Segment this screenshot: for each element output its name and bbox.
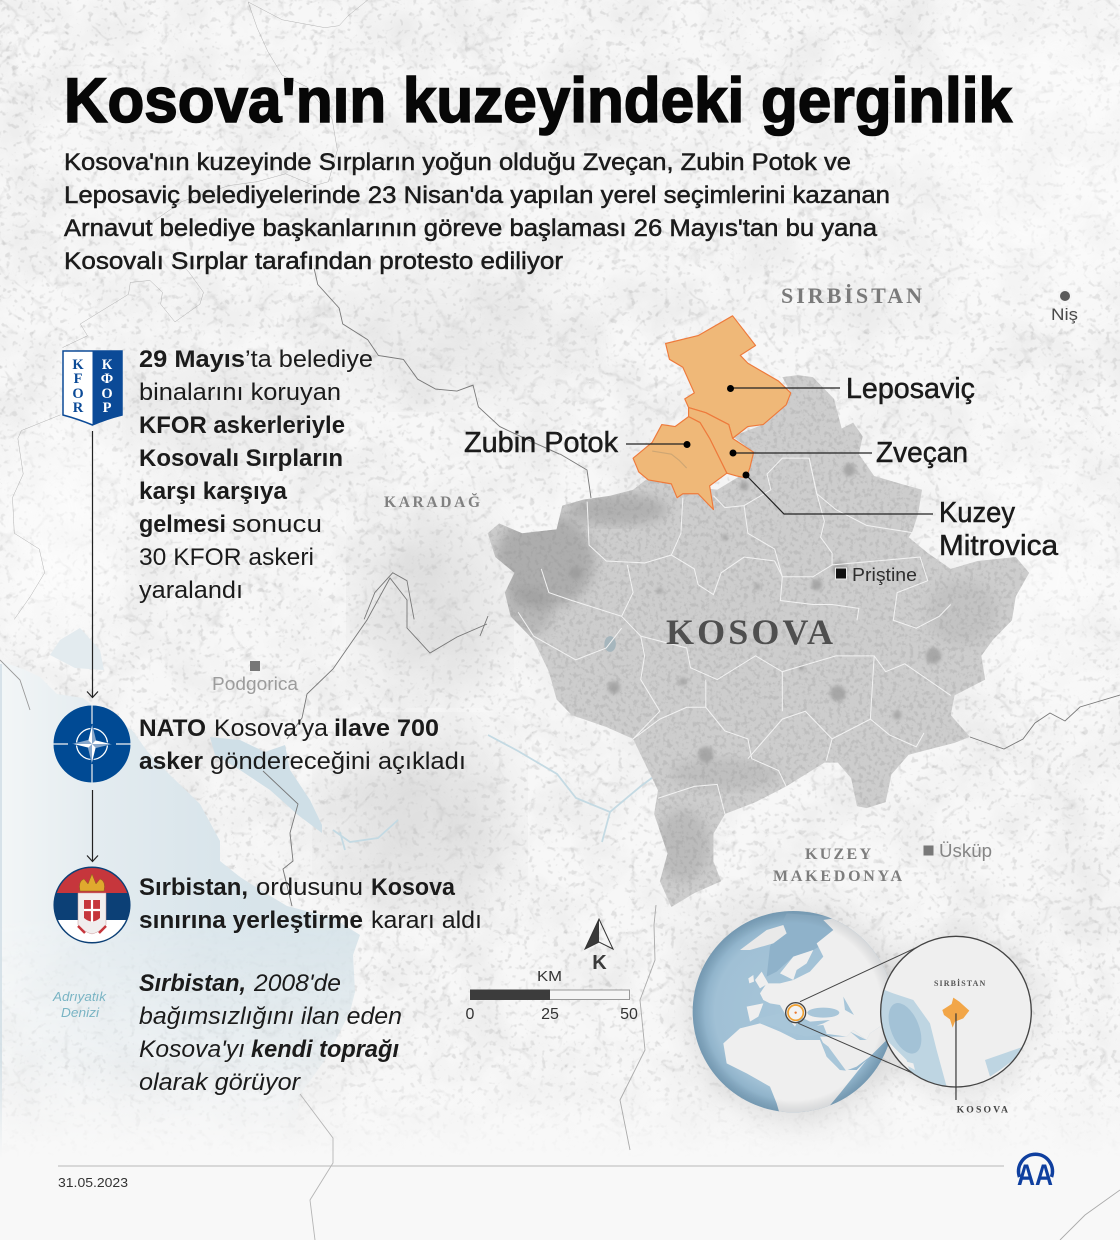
region: Zubin Potok (633, 417, 727, 510)
label: KOSOVA: KOSOVA (666, 612, 833, 652)
intro text: Arnavut belediye başkanlarının göreve başlaması 26 Mayıs'tan bu yana (64, 215, 877, 242)
label: Adriyatik Denizi (52, 989, 108, 1020)
text: 29 Mayıs: ’ta belediye (245, 346, 373, 373)
callout: Zveçan: Zveçan (876, 437, 968, 469)
region: Zvečan (689, 408, 754, 478)
text: Sırbistan 2008: kendi toprağı (251, 1036, 399, 1063)
text: Sırbistan 2008: 2008'de (253, 970, 341, 997)
footer line (58, 1165, 1004, 1167)
callout: Kuzey Mitrovica (742, 472, 1058, 562)
icon: KFOR shield: F (74, 371, 83, 387)
text: 29 Mayıs: binalarını koruyan (139, 379, 341, 406)
text: 29 Mayıs: gelmesi (139, 511, 226, 538)
callout: Kuzey Mitrovica: Mitrovica (939, 530, 1058, 562)
scale bar: 25 (541, 1006, 559, 1023)
icon: KFOR shield: K (72, 357, 84, 373)
text: NATO: asker (139, 748, 203, 775)
scale bar: 0 (466, 1006, 475, 1023)
city: Üsküp: Üsküp (939, 840, 992, 861)
icon: KFOR shield: О (101, 386, 113, 402)
text: Sırbistan 2008 (139, 970, 402, 1096)
globe (692, 911, 888, 1112)
icon: KFOR shield (63, 351, 122, 425)
lake and rivers (50, 628, 660, 850)
text: 29 Mayıs: sonucu (232, 511, 322, 538)
icon: KFOR shield: Ф (101, 371, 113, 387)
intro text: Kosova'nın kuzeyinde Sırpların yoğun olduğu Zveçan, Zubin Potok ve (64, 149, 851, 176)
intro text (64, 149, 890, 275)
text: 29 Mayıs: 30 KFOR askeri (139, 544, 314, 571)
title: Kosova'nın kuzeyindeki gerginlik (64, 66, 1013, 136)
text: Sırbistan army: Kosova (371, 874, 455, 901)
region: Leposavić (666, 316, 791, 438)
text: NATO: Kosova'ya (214, 715, 328, 742)
text: NATO: ilave 700 (334, 715, 439, 742)
callout: Zubin Potok (464, 427, 690, 459)
inset line (954, 1013, 958, 1100)
icon: KFOR shield: O (72, 386, 84, 402)
city: Niş: Niş (1051, 305, 1078, 324)
label: Adriyatik Denizi: Denizi (61, 1005, 100, 1020)
icon: Serbia flag (53, 866, 131, 944)
text: Sırbistan army: Sırbistan, (139, 874, 248, 901)
locator label: KOSOVA (957, 1105, 1008, 1116)
intro text: Kosovalı Sırplar tarafından protesto ediliyor (64, 248, 563, 275)
city: Priştine: Priştine (852, 564, 917, 585)
icon: KFOR shield: Р (103, 400, 112, 416)
callout: Leposaviç: Leposaviç (846, 373, 975, 405)
icon: KFOR shield: К (102, 357, 113, 373)
text: 29 Mayıs (139, 346, 373, 604)
callout: Leposaviç (727, 373, 975, 405)
callout: Kuzey Mitrovica: Kuzey (939, 497, 1016, 529)
text: Sırbistan 2008: olarak görüyor (139, 1069, 301, 1096)
label: SIRBİSTAN: SIRBİSTAN (781, 283, 922, 308)
label: Adriyatik Denizi: Adrıyatık (52, 989, 108, 1004)
label: Kuzey Makedonya: MAKEDONYA (773, 868, 902, 885)
text: Sırbistan army: ordusunu (256, 874, 363, 901)
connector lines (798, 947, 928, 1080)
text: Sırbistan army (139, 874, 482, 934)
icon: NATO (54, 706, 131, 782)
city: Podgorica: Podgorica (212, 673, 299, 694)
map: Kosovo (480, 316, 1054, 913)
icon: KFOR shield: R (73, 400, 84, 416)
city: Niş (1051, 290, 1078, 324)
inset Kosovo (942, 998, 969, 1028)
location ring (786, 1003, 806, 1023)
scale bar (466, 968, 638, 1023)
text: 29 Mayıs: Kosovalı Sırpların (139, 445, 343, 472)
arrow: KFOR to NATO (87, 431, 98, 698)
inset label: SIRBİSTAN (934, 978, 986, 988)
date: 31.05.2023 (58, 1175, 128, 1190)
text: NATO: göndereceğini açıkladı (210, 748, 466, 775)
cities (570, 464, 941, 763)
Kosovo territory (480, 359, 1054, 913)
text: Sırbistan army: kararı aldı (371, 907, 482, 934)
text: Sırbistan 2008: Sırbistan, (139, 970, 246, 997)
northern municipalities (633, 316, 791, 510)
municipal boundaries (518, 458, 951, 814)
icon: north arrow (585, 919, 613, 974)
scale bar: KM (537, 968, 562, 985)
text: 29 Mayıs: karşı karşıya (139, 478, 287, 505)
label: Kuzey Makedonya: KUZEY (805, 846, 871, 863)
icon: north arrow: K (592, 952, 607, 974)
callout: Zveçan (730, 437, 968, 469)
text: Sırbistan 2008: Kosova'yı (139, 1036, 245, 1063)
callout: Zubin Potok: Zubin Potok (464, 427, 619, 459)
text: 29 Mayıs: 29 Mayıs (139, 346, 245, 373)
arrow: NATO to Serbia (87, 790, 98, 862)
text: NATO: NATO (139, 715, 206, 742)
text: 29 Mayıs: yaralandı (139, 577, 243, 604)
text: NATO (139, 715, 466, 775)
sea: Adriatic (2, 664, 360, 1080)
text: 29 Mayıs: KFOR askerleriyle (139, 412, 345, 439)
text: Sırbistan army: sınırına yerleştirme (139, 907, 363, 934)
inset map (880, 936, 1031, 1087)
scale bar: 50 (620, 1006, 638, 1023)
text: Sırbistan 2008: bağımsızlığını ilan eden (139, 1003, 402, 1030)
globe locator (689, 908, 1034, 1120)
intro text: Leposaviç belediyelerinde 23 Nisan'da yapılan yerel seçimlerini kazanan (64, 182, 890, 209)
label: Kuzey Makedonya (773, 846, 902, 885)
logo: AA: AA (1017, 1159, 1053, 1192)
city: Podgorica (212, 661, 299, 694)
bottom fade (0, 1060, 1120, 1160)
label: KARADAĞ: KARADAĞ (384, 494, 480, 511)
